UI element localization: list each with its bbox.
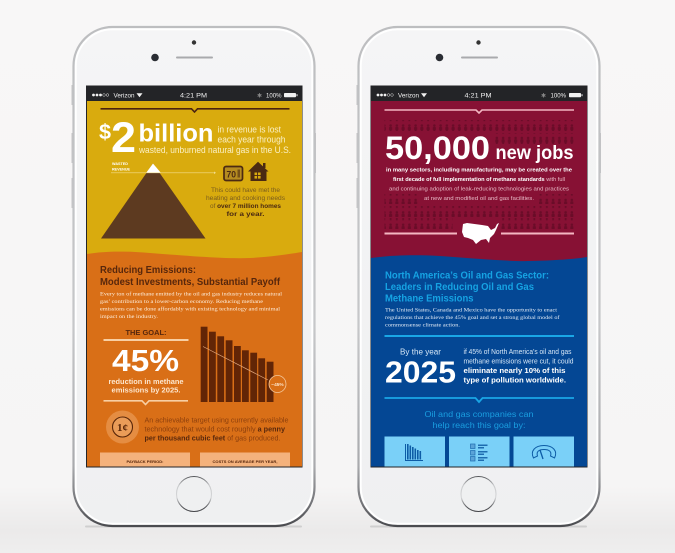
status bar: 100% — [266, 92, 282, 100]
heading: Reducing Emissions: — [100, 265, 196, 276]
homes text block: heating and cooking needs — [206, 195, 286, 202]
body text: impact on the industry. — [100, 314, 159, 320]
by the year 2025 callout: 2025 — [385, 354, 456, 390]
phone 1: orange and yellow infographic — [72, 27, 316, 528]
divider and icon: US map — [384, 223, 574, 244]
heading — [385, 270, 549, 304]
headline: $2 billion: billion — [138, 120, 214, 148]
status bar: 4:21 PM — [464, 92, 492, 100]
the goal callout: 45% — [112, 343, 179, 378]
phone 2 body — [356, 27, 601, 528]
jobs text block: first decade of full implementation of methane standards with full — [393, 177, 565, 183]
payback period card — [100, 452, 190, 466]
headline: $2 billion: wasted, unburned natural gas in the U.S. — [138, 145, 291, 155]
lower divider with notch — [384, 398, 574, 402]
body text — [385, 308, 560, 328]
status bar: Verizon — [398, 92, 420, 100]
headline: 50,000 new jobs: 50,000 — [385, 130, 490, 166]
heading: Modest Investments, Substantial Payoff — [100, 277, 281, 288]
status bar — [92, 92, 297, 100]
by the year 2025 callout: By the year — [400, 348, 441, 356]
heading: Leaders in Reducing Oil and Gas — [385, 282, 534, 293]
heading — [100, 265, 281, 288]
body text: emissions can be done affordably with existing technology and minimal — [100, 306, 280, 312]
mountain chart: wasted revenue — [101, 162, 216, 238]
top divider with notch — [100, 109, 290, 112]
status bar: 4:21 PM — [180, 92, 207, 100]
the goal callout: THE GOAL: — [126, 328, 166, 337]
phone 1 earpiece and camera — [151, 40, 213, 61]
homes text block: of over 7 million homes — [210, 203, 281, 210]
companies heading: help reach this goal by: — [432, 420, 526, 430]
icon: one cent coin — [106, 410, 139, 444]
card: checklist icon — [449, 436, 510, 466]
people pattern — [384, 120, 574, 229]
body text: Every ton of methane emitted by the oil and gas industry reduces natural — [100, 290, 282, 298]
costs card — [200, 452, 290, 466]
pollution text block: type of pollution worldwide. — [464, 378, 566, 384]
penny text block: An achievable target using currently available — [144, 416, 288, 424]
phone 2: crimson and blue infographic — [356, 27, 601, 528]
jobs text block: and continuing adoption of leak-reducing technologies and practices — [389, 186, 569, 192]
status bar — [377, 92, 582, 100]
headline: $2 billion: each year through — [218, 134, 286, 144]
status bar: Verizon — [114, 92, 135, 100]
phone 1 screen — [86, 86, 302, 468]
top divider with notch — [384, 110, 574, 113]
mountain chart: wasted revenue: REVENUE — [112, 168, 131, 172]
phone 2 home button — [461, 476, 496, 512]
icon: house — [248, 162, 268, 181]
headline: 50,000 new jobs — [385, 130, 574, 166]
pollution text block: if 45% of North America’s oil and gas — [464, 349, 572, 356]
panel: North America's oil and gas sector — [371, 255, 587, 466]
penny text block: technology that would cost roughly a penny — [144, 424, 286, 434]
phone 2 earpiece and camera — [436, 40, 498, 61]
body text: gas’ contribution to a lower-carbon economy. Reducing methane — [100, 299, 264, 305]
homes text block — [206, 187, 286, 218]
body text: The United States, Canada and Mexico have the opportunity to enact — [385, 308, 557, 314]
phone 2 screen — [370, 86, 588, 468]
the goal callout — [104, 328, 188, 404]
phone 1 home button — [176, 476, 212, 512]
jobs text block: at new and modified oil and gas facilities. — [424, 196, 534, 202]
heading: Methane Emissions — [385, 294, 474, 304]
body text: commonsense climate action. — [385, 322, 461, 328]
phone 1 body — [72, 27, 316, 528]
pollution text block: methane emissions were cut, it could — [464, 358, 574, 366]
jobs text block: in many sectors, including manufacturing, may be created over the — [386, 168, 573, 174]
bar chart: emissions decline — [201, 327, 286, 402]
body text: regulations that achieve the 45% goal and set a strong global model of — [385, 314, 560, 321]
companies heading — [424, 409, 534, 430]
headline: $2 billion: $ — [99, 121, 111, 144]
mountain chart: wasted revenue: WASTED — [112, 162, 129, 166]
jobs text block — [386, 168, 573, 202]
payback period card: PAYBACK PERIOD: — [126, 460, 164, 464]
heading: North America’s Oil and Gas Sector: — [385, 270, 549, 282]
pollution text block — [464, 349, 574, 384]
the goal callout: emissions by 2025. — [112, 386, 180, 394]
icon: one cent coin: 1¢ — [117, 422, 128, 434]
headline: 50,000 new jobs: new jobs — [496, 142, 574, 164]
costs card: COSTS ON AVERAGE PER YEAR, — [212, 460, 278, 464]
penny text block — [144, 416, 288, 442]
body text — [100, 290, 282, 320]
headline: $2 billion: 2 — [111, 114, 136, 162]
the goal callout: reduction in methane — [108, 377, 184, 386]
bar chart: emissions decline: −45% — [271, 382, 284, 388]
pollution text block: eliminate nearly 10% of this — [464, 368, 566, 375]
panel: reducing emissions — [87, 252, 302, 466]
status bar: ✱ — [541, 92, 546, 100]
card: bar chart icon — [384, 436, 445, 466]
status bar: ✱ — [257, 92, 262, 100]
headline: $2 billion — [99, 114, 291, 162]
headline: $2 billion: in revenue is lost — [218, 124, 281, 134]
icon: thermostat: 70 — [226, 170, 236, 180]
card: gauge icon — [514, 436, 574, 466]
status bar: 100% — [550, 92, 566, 100]
icon: thermostat — [224, 166, 242, 180]
companies heading: Oil and gas companies can — [424, 409, 534, 419]
homes text block: for a year. — [226, 211, 265, 218]
homes text block: This could have met the — [211, 187, 280, 194]
penny text block: per thousand cubic feet of gas produced. — [144, 434, 280, 442]
